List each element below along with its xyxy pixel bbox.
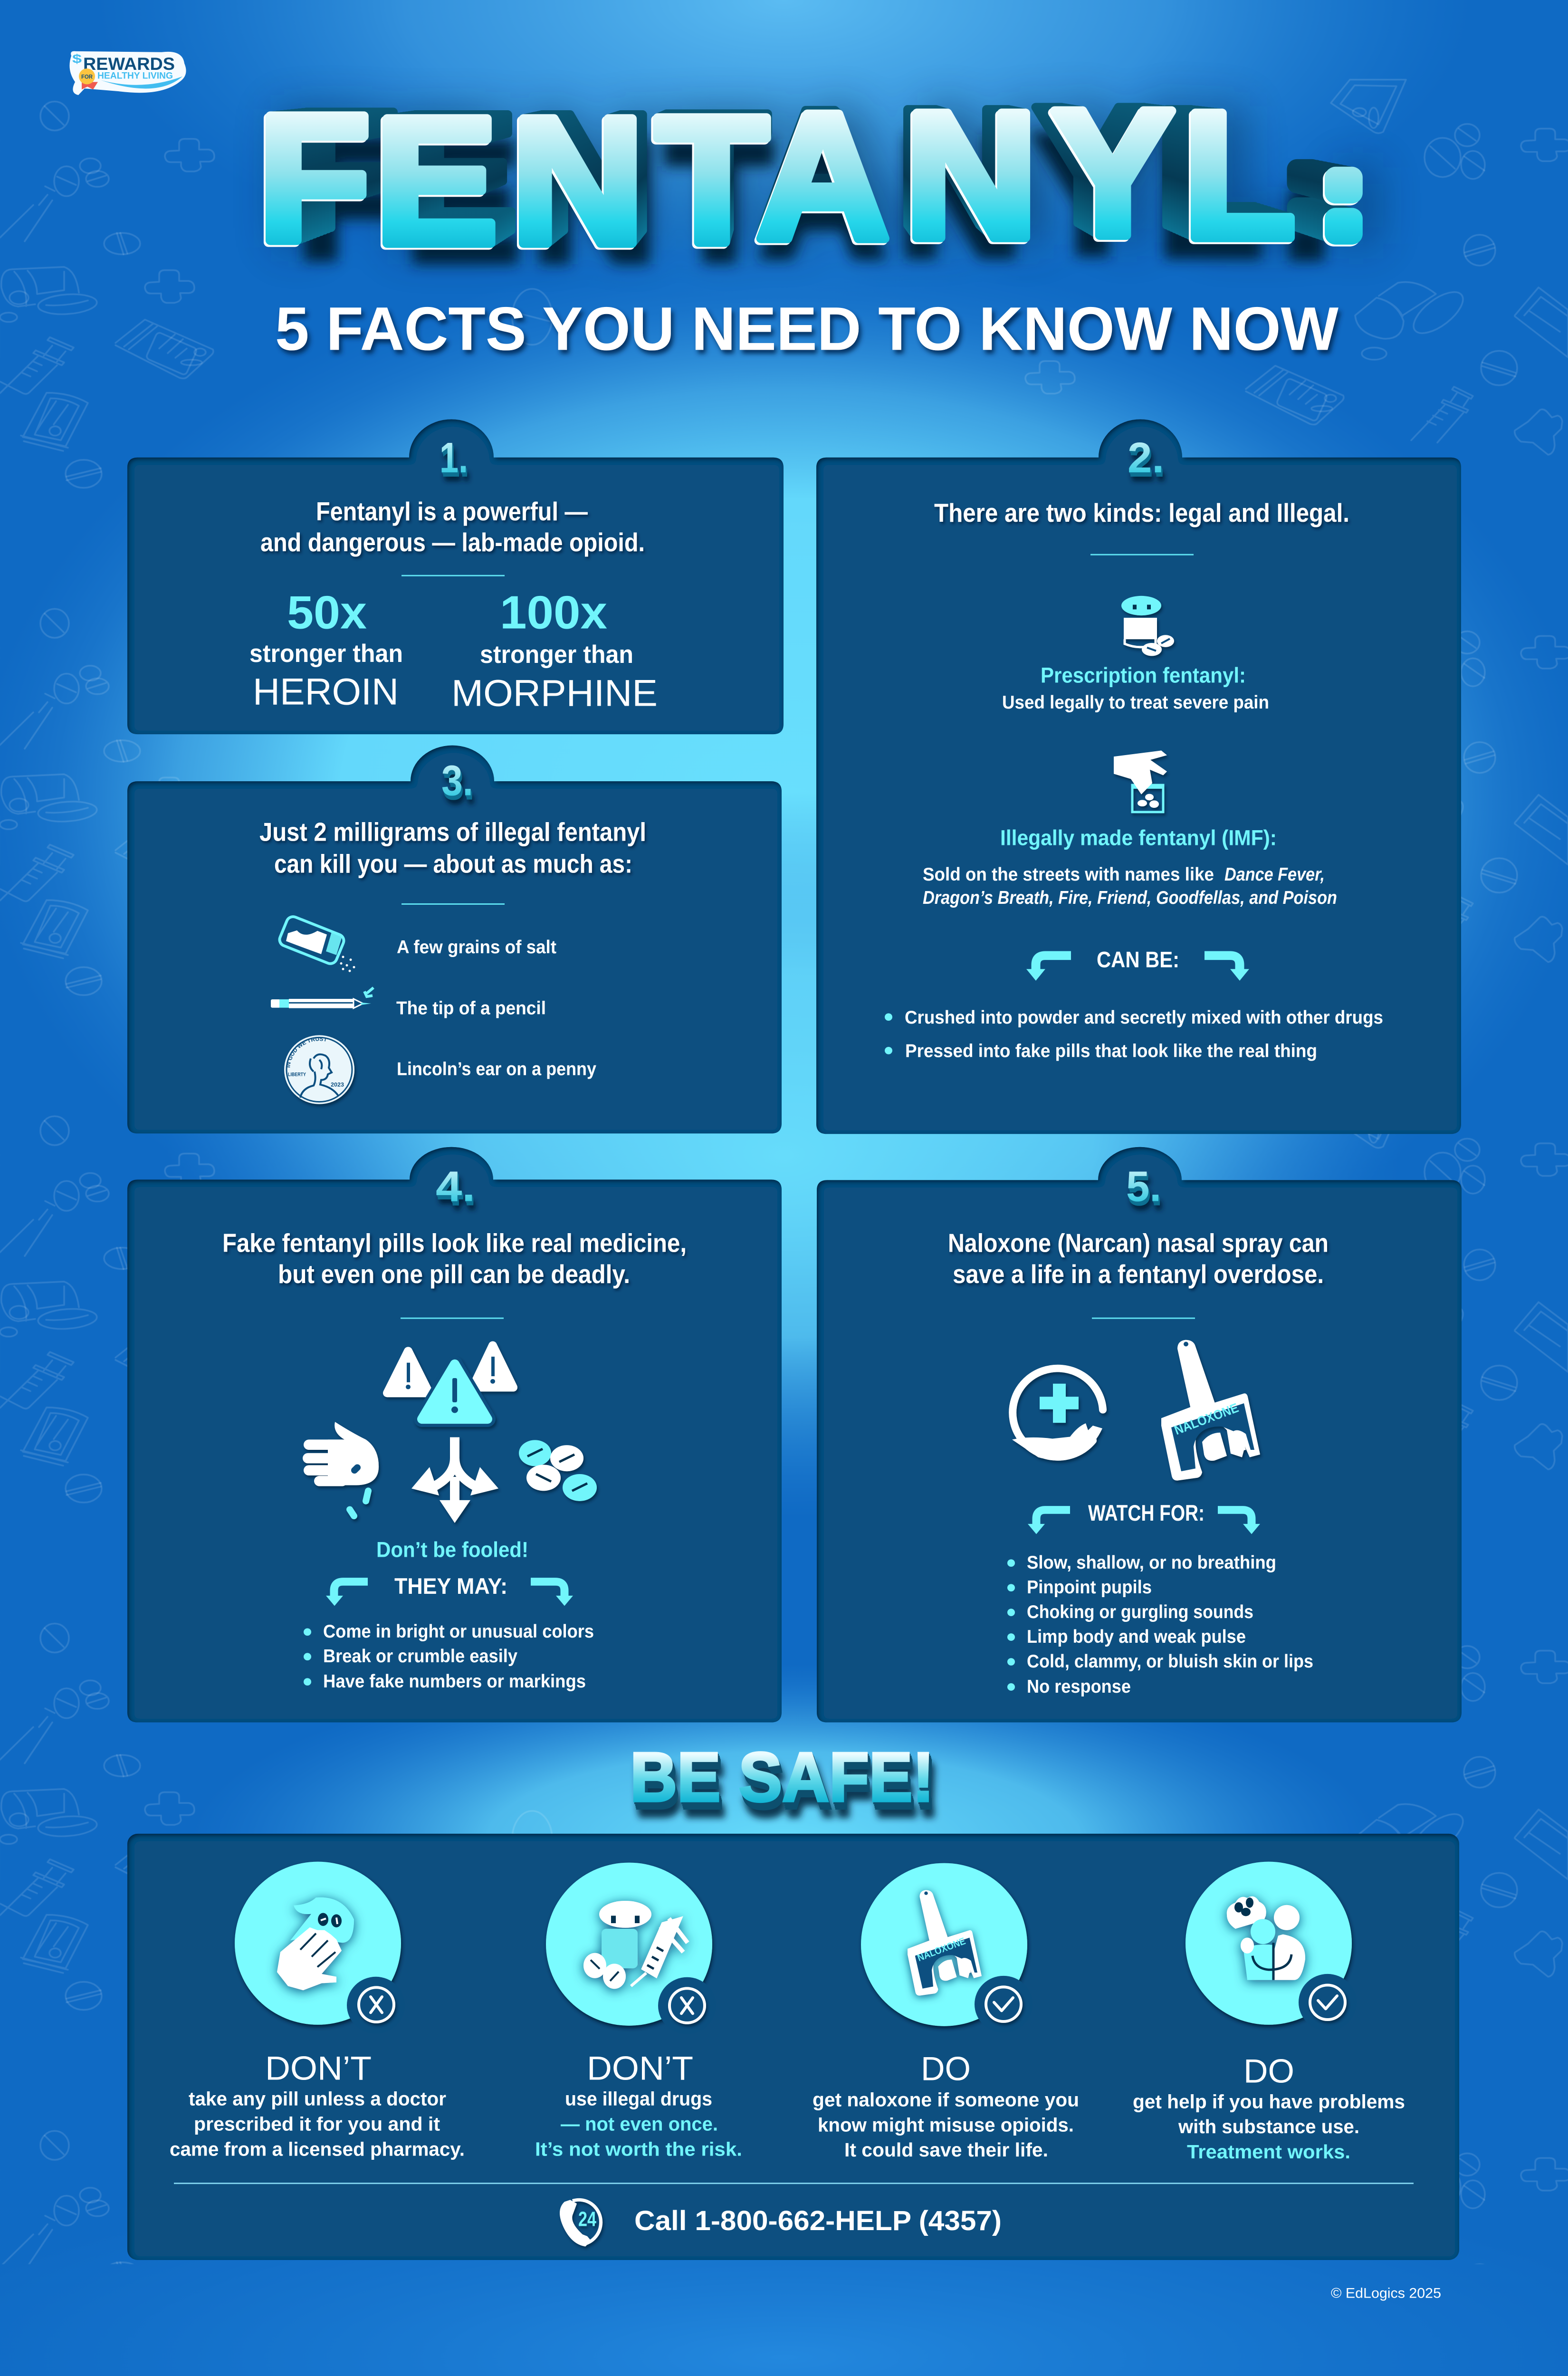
item 2: dont use drugs: [535, 1863, 742, 2160]
panel 1 heading: and dangerous — lab-made opioid.: [260, 527, 645, 557]
badge: check: [1310, 1985, 1345, 2020]
panel 4 heading: [222, 1228, 687, 1289]
panel 1 heading: Fentanyl is a powerful —: [316, 497, 588, 526]
panel 5 heading: save a life in a fentanyl overdose.: [953, 1259, 1324, 1289]
icon: 24h phone: [560, 2200, 601, 2246]
stat: 50x heroin: stronger than: [249, 640, 403, 668]
badge: check: [986, 1987, 1021, 2022]
bullets: Pinpoint pupils: [1027, 1577, 1152, 1598]
stat: 100x morphine: 100x: [500, 586, 607, 638]
arrow left: [326, 1581, 368, 1606]
number 2: 2.: [1128, 434, 1164, 482]
prescription text: Used legally to treat severe pain: [1002, 692, 1269, 713]
number 1: 1.: [440, 434, 468, 482]
icon: hand and bag: [1114, 750, 1167, 812]
number 4: 4.: [436, 1163, 475, 1210]
they may label: THEY MAY:: [394, 1574, 507, 1599]
logo: HEALTHY LIVING: [97, 71, 173, 81]
panel 3 shape: [127, 746, 782, 1133]
badge: x: [669, 1988, 705, 2023]
heading: be safe: BE SAFE!: [630, 1739, 934, 1816]
icon circle: family hug: [1186, 1862, 1357, 2031]
panel 4: fake pills: [127, 1147, 782, 1723]
item 4: do get help: [1133, 1862, 1405, 2163]
text: salt: A few grains of salt: [397, 937, 556, 958]
panel 1 shape: [127, 419, 784, 734]
bullets: Crushed into powder and secretly mixed with other drugs: [905, 1007, 1383, 1028]
item 3: do get naloxone: [813, 1863, 1079, 2161]
arrow right: [1218, 1510, 1260, 1534]
text: dont use: — not even once.: [561, 2113, 718, 2135]
icon: penny: 2023: [331, 1081, 344, 1088]
illegal text: Dance Fever,: [1224, 864, 1325, 885]
icon circle: hand and pills: [235, 1862, 405, 2033]
bullets: [304, 1621, 594, 1692]
text: do get help: [1133, 2090, 1405, 2163]
logo: FOR: [81, 74, 93, 80]
arrow right: [1205, 956, 1249, 981]
icon circle: bottle and syringe: [546, 1863, 716, 2034]
can be label: CAN BE:: [1097, 948, 1179, 972]
text: dont take: take any pill unless a doctor: [189, 2088, 446, 2109]
arrow right: [531, 1581, 573, 1606]
icon: care hand: [1012, 1369, 1103, 1459]
illegal text: Dragon’s Breath, Fire, Friend, Goodfellas, and Poison: [923, 887, 1337, 908]
copyright: © EdLogics 2025: [1331, 2286, 1441, 2301]
panel 4 heading: Fake fentanyl pills look like real medicine,: [222, 1228, 687, 1257]
text: do get naloxone: It could save their life.: [844, 2139, 1048, 2161]
label: dont: DON’T: [587, 2050, 693, 2087]
watch for label: WATCH FOR:: [1088, 1501, 1205, 1526]
bullets: Break or crumble easily: [323, 1646, 517, 1667]
title: FENTANYL:: FENTANYL: [258, 72, 1296, 282]
icon: 24h phone: 24: [578, 2208, 596, 2231]
stat: 100x morphine: MORPHINE: [451, 672, 658, 714]
prescription text: Prescription fentanyl:: [1041, 663, 1246, 687]
label: do: DO: [921, 2050, 971, 2088]
stat: 50x heroin: 50x: [287, 586, 367, 638]
text: do get naloxone: know might misuse opioids.: [818, 2114, 1074, 2136]
number 5: 5.: [1126, 1163, 1161, 1210]
text: dont use: use illegal drugs: [565, 2088, 712, 2109]
bullets: [1007, 1552, 1313, 1697]
icon: splitting arrows: [411, 1437, 498, 1523]
panel 3 heading: can kill you — about as much as:: [274, 849, 632, 878]
panel 3 heading: Just 2 milligrams of illegal fentanyl: [259, 817, 646, 846]
icon: naloxone spray: [1161, 1340, 1260, 1481]
icon circle: naloxone: [861, 1863, 1033, 2032]
stat: 100x morphine: stronger than: [480, 641, 633, 669]
bullets: Slow, shallow, or no breathing: [1027, 1552, 1276, 1573]
panel 5: naloxone: [817, 1147, 1462, 1723]
text: do get help: Treatment works.: [1187, 2141, 1350, 2163]
icon: penny: IN GOD WE TRUST: [285, 1035, 328, 1068]
bullets: Pressed into fake pills that look like the real thing: [905, 1041, 1317, 1061]
logo: $: [72, 53, 82, 66]
panel 2 heading: There are two kinds: legal and Illegal.: [934, 498, 1349, 527]
panel: be safe: [127, 1834, 1459, 2260]
text: penny: Lincoln’s ear on a penny: [397, 1059, 596, 1080]
panel 5 heading: [948, 1228, 1329, 1289]
icon: pills: [519, 1440, 597, 1501]
panel 3 heading: [259, 817, 646, 878]
be safe panel shape: [127, 1834, 1459, 2260]
text: dont take: [170, 2088, 465, 2160]
icon circle: naloxone: NALOXONE: [916, 1935, 967, 1964]
bullets: Choking or gurgling sounds: [1027, 1601, 1253, 1622]
badge: x: [359, 1987, 394, 2022]
bullets: No response: [1027, 1676, 1131, 1697]
arrow left: [1028, 1510, 1070, 1534]
subtitle: 5 FACTS YOU NEED TO KNOW NOW: [275, 294, 1339, 363]
icon: salt shaker: [277, 915, 355, 972]
item 1: dont take pills: [170, 1862, 465, 2160]
panel 3: 2 milligrams: [127, 746, 782, 1133]
label: do: DO: [1243, 2052, 1294, 2090]
panel 2 shape: [816, 419, 1461, 1134]
bullets: Cold, clammy, or bluish skin or lips: [1027, 1651, 1313, 1672]
icon: naloxone spray: NALOXONE: [1172, 1400, 1241, 1437]
text: do get help: with substance use.: [1178, 2116, 1359, 2137]
illegal text: [923, 826, 1337, 908]
bullets: Limp body and weak pulse: [1027, 1626, 1246, 1647]
icon: penny: [284, 1035, 354, 1104]
icon: crumbling hand: [308, 1422, 379, 1516]
panel 1: powerful opioid: [127, 419, 784, 734]
prescription text: [1002, 663, 1269, 713]
text: dont take: came from a licensed pharmacy.: [170, 2138, 465, 2160]
bullets: Come in bright or unusual colors: [323, 1621, 594, 1642]
text: helpline: Call 1-800-662-HELP (4357): [634, 2205, 1002, 2236]
bullets: [885, 1007, 1383, 1061]
text: pencil: The tip of a pencil: [396, 998, 546, 1018]
text: dont take: prescribed it for you and it: [194, 2113, 440, 2135]
panel 5 heading: Naloxone (Narcan) nasal spray can: [948, 1228, 1329, 1257]
dont be fooled: Don’t be fooled!: [376, 1538, 528, 1562]
panel 4 heading: but even one pill can be deadly.: [278, 1259, 630, 1289]
icon: pencil: [271, 987, 373, 1008]
panel 5 shape: [817, 1147, 1462, 1723]
title: FENTANYL:: :: [1325, 133, 1363, 258]
logo: [69, 51, 186, 95]
text: dont use: It’s not worth the risk.: [535, 2138, 742, 2160]
icon: warning triangles: [387, 1345, 513, 1419]
label: dont: DON’T: [265, 2050, 372, 2087]
panel 1 heading: [260, 497, 645, 557]
illegal text: Sold on the streets with names like: [923, 864, 1214, 885]
icon: penny: LIBERTY: [288, 1072, 306, 1078]
stat: 100x morphine: [451, 586, 658, 714]
text: do get help: get help if you have problems: [1133, 2090, 1405, 2112]
stat: 50x heroin: [249, 586, 403, 712]
number 3: 3.: [441, 757, 473, 805]
panel 2: two kinds: [816, 419, 1461, 1134]
arrow left: [1026, 956, 1071, 981]
bullets: Have fake numbers or markings: [323, 1671, 586, 1692]
text: dont use: [535, 2088, 742, 2160]
logo: REWARDS: [83, 54, 175, 74]
panel 4 shape: [127, 1147, 782, 1723]
stat: 50x heroin: HEROIN: [253, 671, 399, 712]
text: do get naloxone: [813, 2089, 1079, 2161]
illegal text: Illegally made fentanyl (IMF):: [1000, 826, 1277, 850]
text: do get naloxone: get naloxone if someone you: [813, 2089, 1079, 2110]
icon: pill bottle: [1121, 596, 1174, 656]
